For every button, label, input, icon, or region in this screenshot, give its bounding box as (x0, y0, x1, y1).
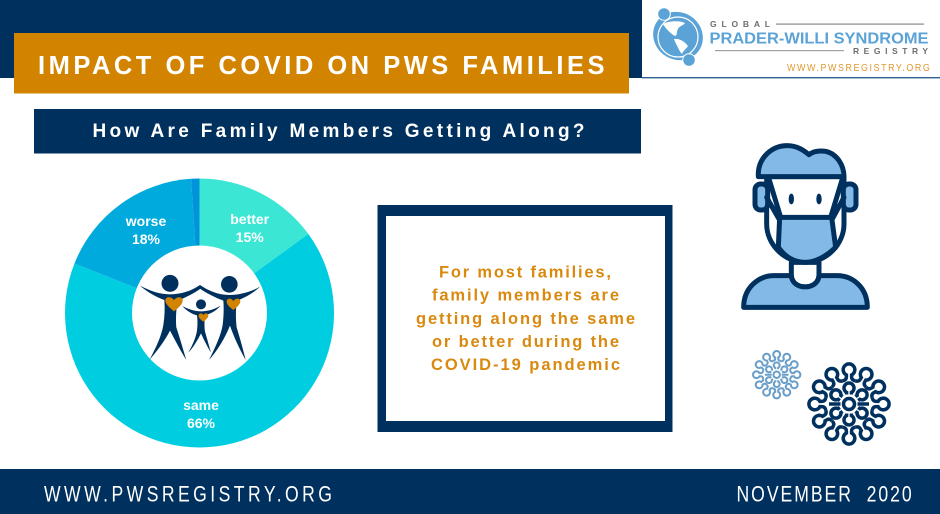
label: same: same (183, 397, 219, 413)
icon: large virus (809, 364, 889, 444)
label: worse: worse (126, 213, 166, 229)
subtitle banner (34, 109, 641, 154)
callout box: getting along the same (416, 310, 635, 328)
logo text: registry: REGISTRY (853, 46, 928, 56)
logo text: global: GLOBAL (710, 19, 770, 29)
callout box: COVID-19 pandemic (431, 356, 620, 374)
header band (0, 0, 642, 78)
callout box: For most families, (439, 264, 611, 282)
callout box: family members are (432, 287, 619, 305)
icon: family with hearts (140, 275, 260, 360)
callout box: or better during the (432, 333, 619, 351)
callout box (378, 205, 672, 432)
slice: small remainder (191, 178, 200, 313)
icon: globe logo (644, 2, 712, 70)
logo panel (642, 0, 940, 78)
slice: same 66% (65, 234, 334, 447)
donut hole (132, 246, 267, 380)
title banner: IMPACT OF COVID ON PWS FAMILIES (38, 52, 604, 80)
donut chart (65, 178, 334, 447)
footer date: NOVEMBER 2020 (736, 483, 912, 507)
label: worse: 18% (132, 231, 161, 247)
icon: small virus (753, 351, 800, 398)
label: better: better (230, 211, 269, 227)
footer url: WWW.PWSREGISTRY.ORG (44, 483, 332, 507)
footer band (0, 469, 940, 514)
icon: person wearing mask (744, 146, 867, 307)
slice: better 15% (200, 178, 308, 313)
label: same: 66% (187, 415, 216, 431)
subtitle banner: How Are Family Members Getting Along? (92, 121, 584, 142)
label: better: 15% (236, 229, 264, 245)
logo text: prader-willi syndrome: PRADER-WILLI SYNDROME (710, 30, 929, 48)
slice: worse 18% (74, 179, 200, 313)
logo text: url: WWW.PWSREGISTRY.ORG (787, 62, 930, 74)
title banner (14, 33, 629, 94)
